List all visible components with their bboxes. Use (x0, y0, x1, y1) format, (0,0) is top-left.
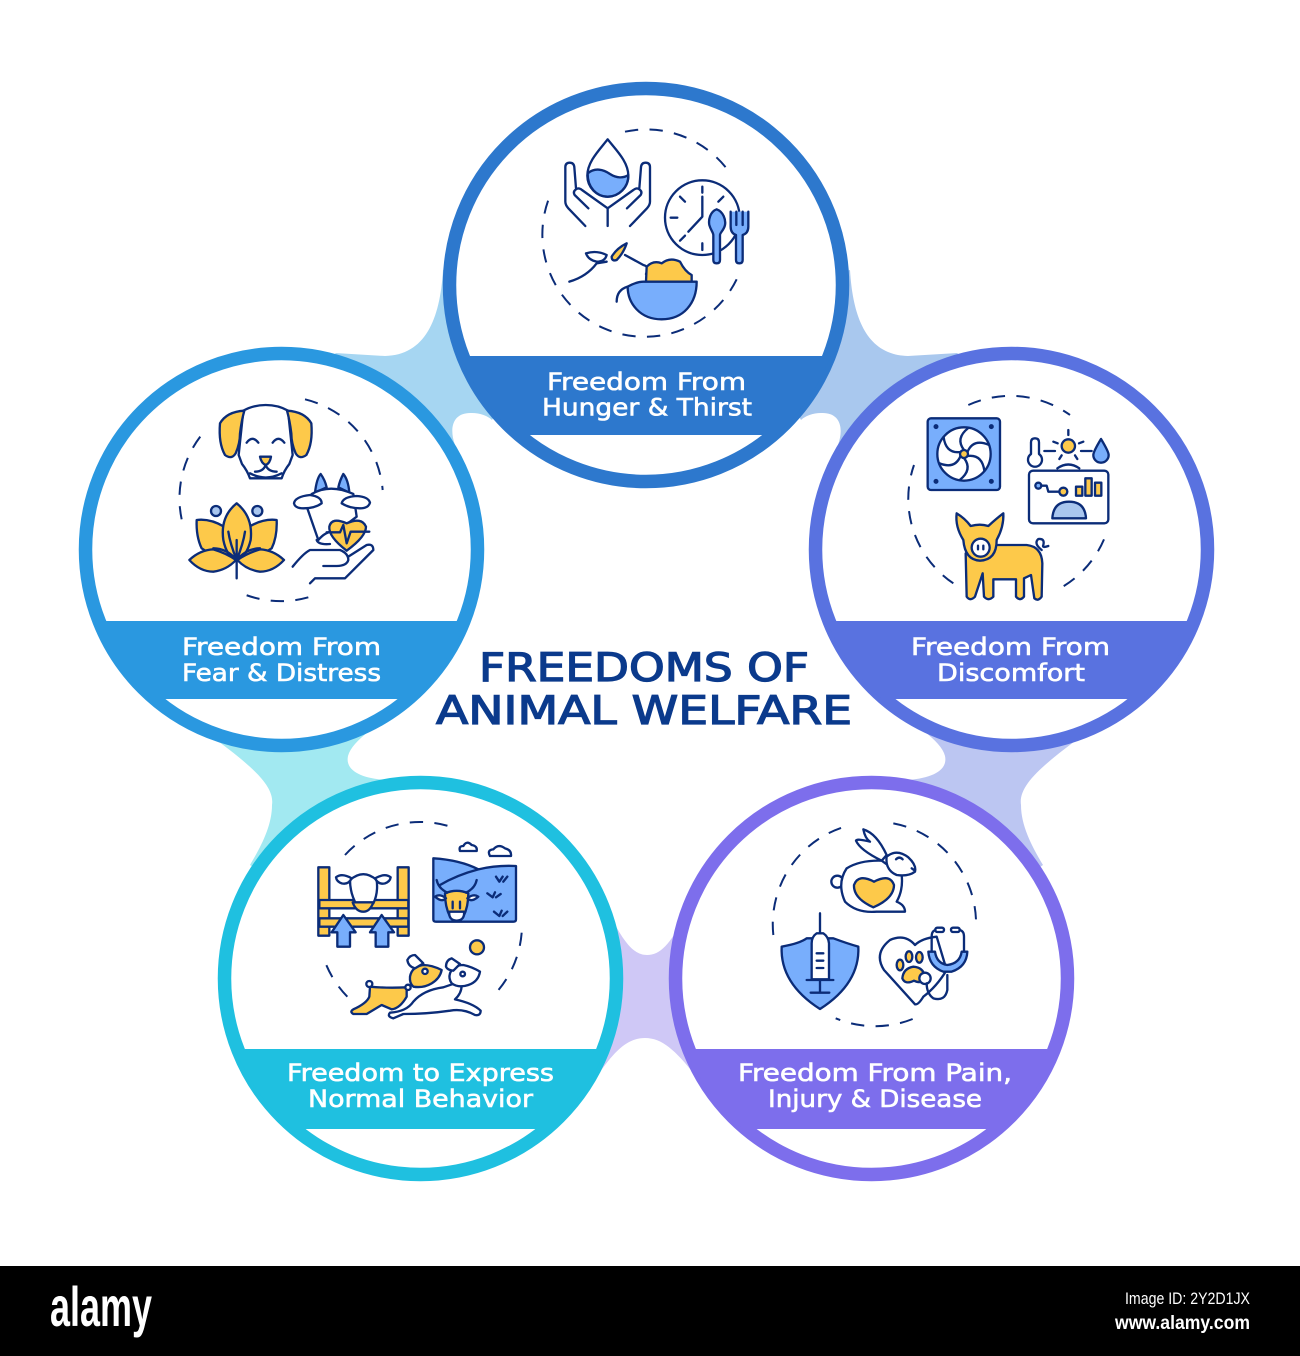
label band (245, 1049, 596, 1129)
icon: fence, pasture and running dogs (318, 822, 522, 1018)
label text: Normal Behavior (308, 1085, 533, 1113)
panel ring (86, 354, 478, 746)
label text: Freedom From (182, 633, 381, 661)
panel ring (224, 782, 616, 1174)
label text: Freedom From (911, 633, 1110, 661)
panel ring (676, 782, 1068, 1174)
title (436, 646, 852, 734)
panel: freedom to express normal behavior (215, 782, 627, 1174)
label band (470, 356, 822, 435)
label text: Freedom From Pain, (738, 1059, 1012, 1087)
panel: freedom from pain, injury and disease (666, 782, 1078, 1174)
panel: freedom from discomfort (806, 354, 1218, 746)
label text: Fear & Distress (182, 659, 381, 687)
label text: Discomfort (937, 659, 1085, 687)
title line one: FREEDOMS OF (479, 646, 809, 691)
label text: Hunger & Thirst (542, 394, 752, 422)
icon: fan, climate sensors and pig (908, 396, 1109, 600)
icon: rabbit, vaccine shield and vet heart (773, 823, 976, 1026)
label text: Injury & Disease (768, 1085, 982, 1113)
website: www.alamy.com (1114, 1313, 1250, 1334)
connector: hunger to discomfort (733, 270, 958, 480)
panel ring (816, 354, 1208, 746)
connector: discomfort to pain (908, 650, 1083, 900)
panel ring (450, 88, 842, 482)
label text: Freedom to Express (287, 1059, 554, 1087)
connector: express behavior to pain (580, 915, 720, 1075)
title line two: ANIMAL WELFARE (436, 689, 852, 734)
footer bar (0, 1266, 1300, 1356)
footer background (0, 1266, 1300, 1356)
footer logo: alamy (50, 1275, 152, 1338)
connector: fear to express behavior (210, 650, 385, 900)
panel: freedom from fear and distress (76, 354, 488, 746)
icon: water, clock and feeding (542, 129, 748, 337)
panel: freedom from hunger and thirst (440, 88, 852, 482)
label band (106, 621, 457, 699)
label band (696, 1049, 1047, 1129)
label text: Freedom From (547, 368, 746, 396)
icon: dog, lotus and cow (179, 399, 383, 601)
label band (836, 621, 1187, 699)
image id: Image ID: 2Y2D1JX (1125, 1289, 1250, 1308)
connector: hunger to fear (335, 270, 560, 480)
